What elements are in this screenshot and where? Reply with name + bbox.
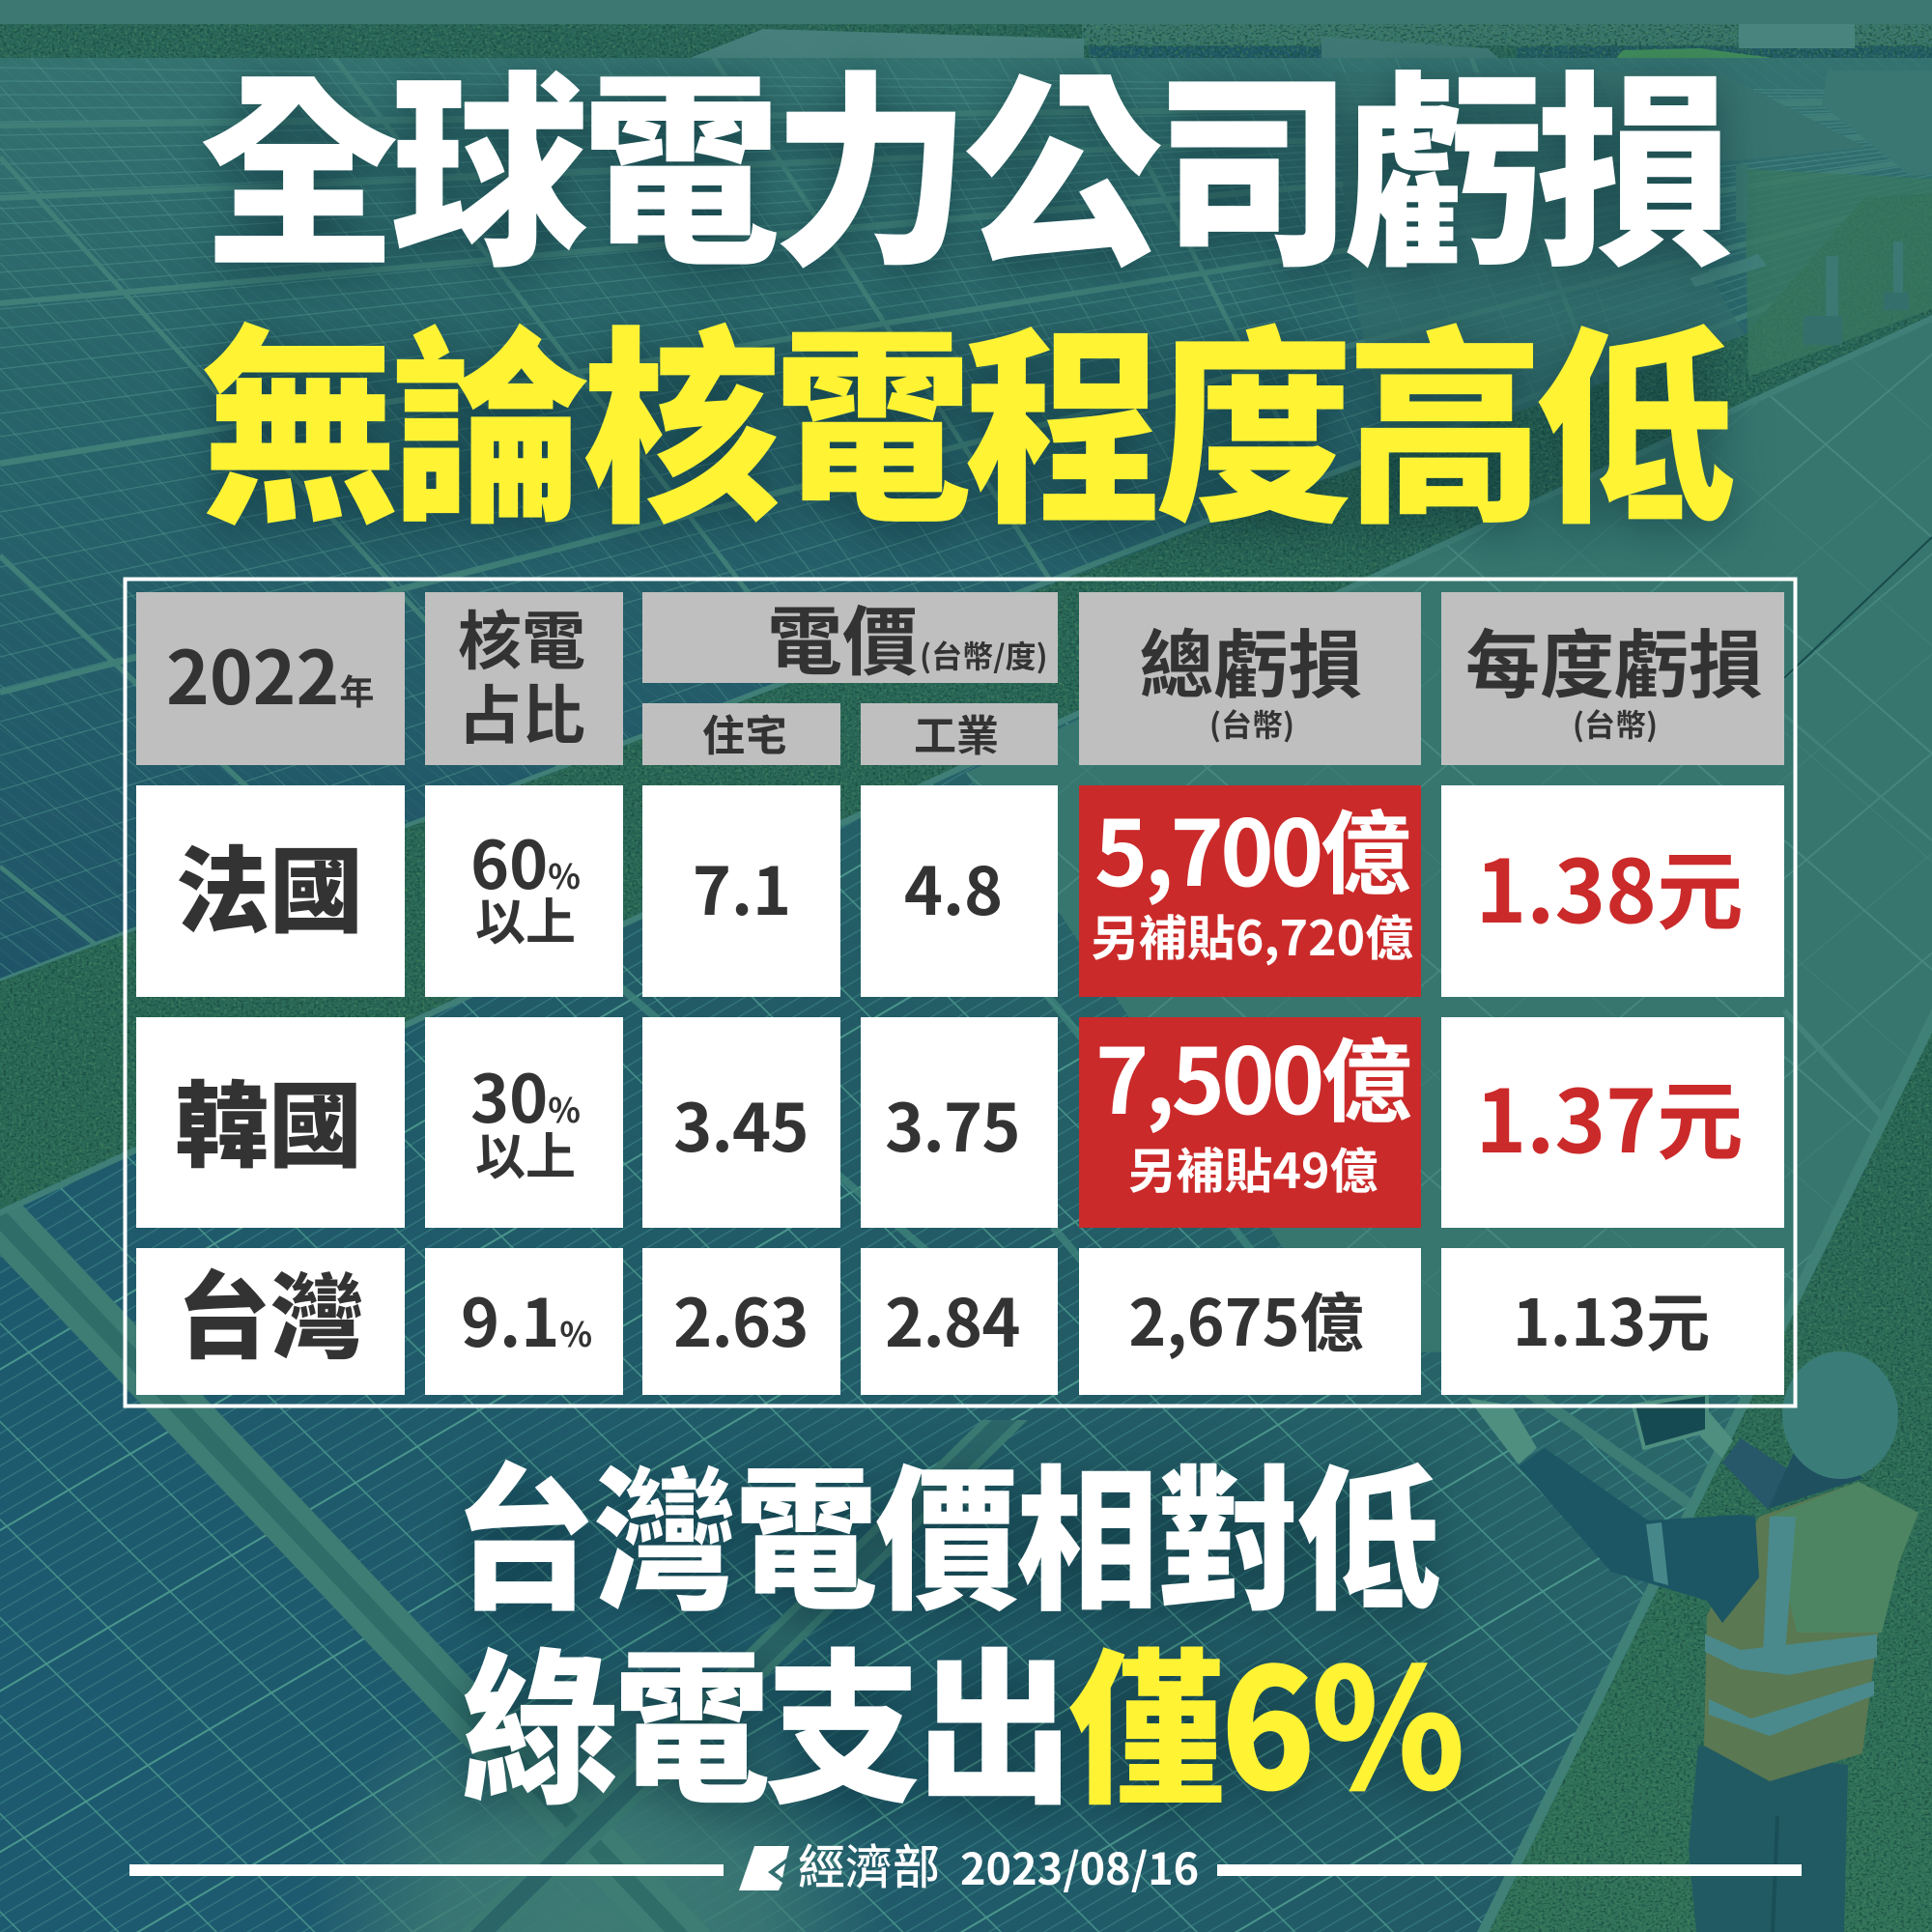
conclusion line 1: 台灣電價相對低 [453,1415,1439,1641]
header: industrial [861,701,1058,765]
header: total loss: 總虧損 [1140,607,1362,714]
header: electricity price [642,582,1058,691]
header: residential [642,701,840,765]
header: loss per kWh [1441,592,1784,765]
row: France: 另補貼6,720億 [1091,900,1413,970]
header: total loss: (台幣) [1209,701,1294,746]
title line 2: 無論核電程度高低 [201,261,1734,565]
row: France [136,781,1784,997]
row: Taiwan: 2.63 [673,1270,809,1366]
row: France: 60% [470,812,581,908]
header: nuclear share: 核電 [458,590,585,683]
row: Taiwan: 9.1% [461,1270,592,1366]
table frame [126,580,1795,1406]
footer: ministry name and date: 經濟部 [798,1830,940,1898]
top strip [0,0,1932,24]
footer rule right [1217,1864,1802,1876]
far buildings and bushes [690,24,1855,164]
row: France: 7.1 [693,838,791,934]
header: year [136,592,405,765]
row: France: 以上 [475,882,576,954]
row: Taiwan: 台灣 [177,1241,364,1378]
row: Taiwan: 2.84 [885,1270,1020,1366]
row: Taiwan: 1.13元 [1513,1272,1710,1365]
header: year: 2022年 [166,619,374,725]
header: electricity price: 電價 [767,582,918,691]
row: South Korea: 另補貼49億 [1128,1133,1378,1203]
top right tilted panels and supports [1333,71,1932,454]
row: South Korea [136,1009,1784,1228]
row: South Korea: 3.75 [885,1075,1020,1171]
row: South Korea: 3.45 [673,1075,809,1171]
header: loss per kWh: (台幣) [1573,701,1658,746]
row: Taiwan: 2,675億 [1128,1272,1364,1365]
row: France: 4.8 [904,838,1003,934]
header: electricity price: (台幣/度) [920,633,1048,677]
footer: ministry name and date [798,1830,1199,1898]
header: residential: 住宅 [702,701,787,763]
title line 1: 全球電力公司虧損 [200,6,1731,307]
worker in helmet and vest [1467,1351,1918,1932]
far tree line [0,24,1932,75]
comparison table [136,582,1784,1395]
header: total loss [1079,592,1421,765]
conclusion line 2: 綠電支出僅6% [462,1597,1462,1838]
row: France: 5,700億 [1094,781,1410,913]
row: Taiwan [136,1241,1784,1395]
row: South Korea: 韓國 [175,1050,362,1186]
header: nuclear share [425,590,623,765]
row: France: 1.38元 [1475,822,1744,948]
row: South Korea: 7,500億 [1095,1009,1411,1141]
upper panel rows [0,58,1932,981]
footer rule left [129,1864,724,1876]
panel frame bars [0,537,1932,1932]
header: nuclear share: 占比 [458,665,585,757]
footer: ministry name and date: 2023/08/16 [960,1834,1199,1897]
icon: ministry logo [739,1846,789,1890]
row: South Korea: 30% [470,1046,581,1142]
row: South Korea: 以上 [475,1117,576,1189]
header: industrial: 工業 [914,701,999,763]
row: France: 法國 [176,815,363,952]
row: South Korea: 1.37元 [1475,1052,1744,1178]
header: loss per kWh: 每度虧損 [1465,607,1763,714]
